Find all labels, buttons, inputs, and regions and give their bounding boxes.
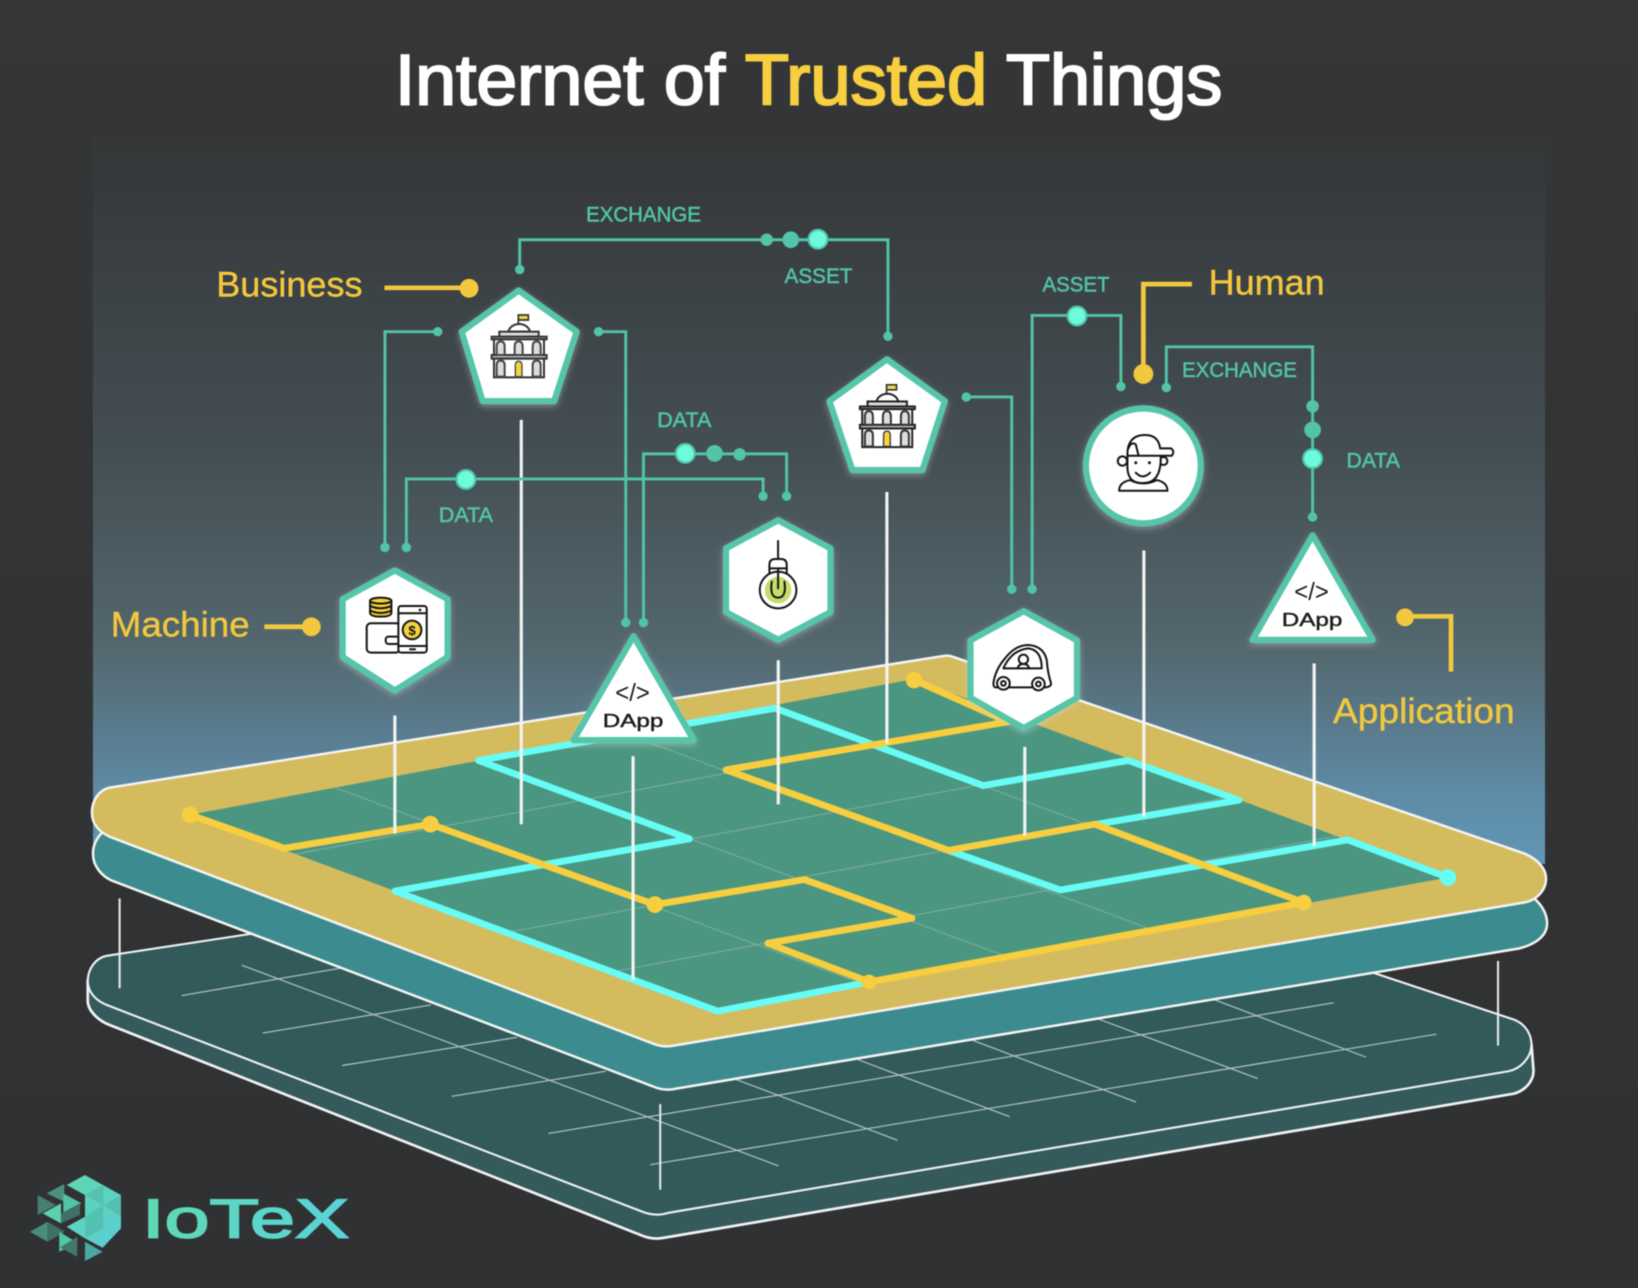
- icon: bank building: [492, 315, 547, 377]
- connector: human to car asset: [1027, 272, 1126, 594]
- title: Things: [1006, 41, 1222, 120]
- icon: lightbulb: [760, 541, 796, 608]
- yellow network path: [182, 672, 1312, 989]
- connector: machine to lightbulb data: [402, 470, 768, 552]
- label: Human: Human: [1209, 263, 1325, 303]
- icon: person with cap: [1118, 435, 1173, 491]
- dapp label: DApp: [1282, 609, 1342, 630]
- connector: human to car asset: ASSET: [1043, 272, 1109, 296]
- title: Internet of: [395, 41, 725, 120]
- connector: human to application: DATA: [1347, 448, 1401, 472]
- node: application triangle: [1253, 535, 1373, 640]
- connector: business to car: [962, 392, 1016, 594]
- icon: logo mark: [30, 1175, 121, 1261]
- icon: self-driving car: [993, 645, 1051, 690]
- icon: code brackets: </>: [615, 679, 650, 707]
- green grid of cells: [190, 679, 1448, 1011]
- connector: business to dapp: [594, 327, 630, 627]
- icon: wallet, coins and phone: $: [408, 623, 416, 638]
- label: Business: [216, 265, 478, 305]
- vertical pins: [395, 420, 1314, 980]
- connector: human to application: [1162, 347, 1401, 522]
- gradient backdrop panel: [93, 136, 1545, 864]
- connector: dapp to lightbulb data: DATA: [657, 408, 712, 432]
- logo wordmark: IoTeX: [142, 1188, 349, 1249]
- node: dapp triangle: [574, 636, 694, 740]
- middle teal platform layer: [93, 830, 1547, 1090]
- title: Trusted: [745, 41, 987, 120]
- label: Human: [1133, 263, 1325, 384]
- lower platform: [88, 836, 1534, 1239]
- support posts: [120, 898, 1498, 1190]
- lower platform grid: [182, 965, 1436, 1166]
- node: car hexagon: [970, 611, 1077, 728]
- title: [395, 41, 1222, 120]
- connector: exchange / asset top: [515, 202, 893, 341]
- connector: dapp to lightbulb data: [639, 408, 791, 627]
- connector: business to machine: [380, 327, 442, 552]
- node: machine hexagon: [343, 570, 448, 690]
- node: second business pentagon: [829, 359, 945, 470]
- top gold platform: [92, 656, 1546, 1046]
- node: human circle: [1086, 408, 1201, 523]
- cyan network path: [395, 708, 1456, 1011]
- logo: [30, 1175, 349, 1261]
- label: Business: Business: [216, 265, 362, 305]
- icon: code brackets: </>: [1294, 578, 1329, 606]
- connector: exchange / asset top: ASSET: [785, 264, 852, 288]
- connector: machine to lightbulb data: DATA: [439, 503, 494, 527]
- label: Machine: [111, 605, 321, 645]
- icon: bank building: [860, 385, 915, 447]
- connector: exchange / asset top: EXCHANGE: [586, 202, 701, 226]
- node: lightbulb hexagon: [726, 520, 830, 640]
- dapp label: DApp: [603, 710, 663, 731]
- label: Application: [1333, 608, 1515, 731]
- connector: human to application: EXCHANGE: [1182, 358, 1297, 382]
- label: Machine: Machine: [111, 605, 250, 645]
- node: business pentagon: [462, 290, 577, 401]
- label: Application: Application: [1333, 691, 1515, 731]
